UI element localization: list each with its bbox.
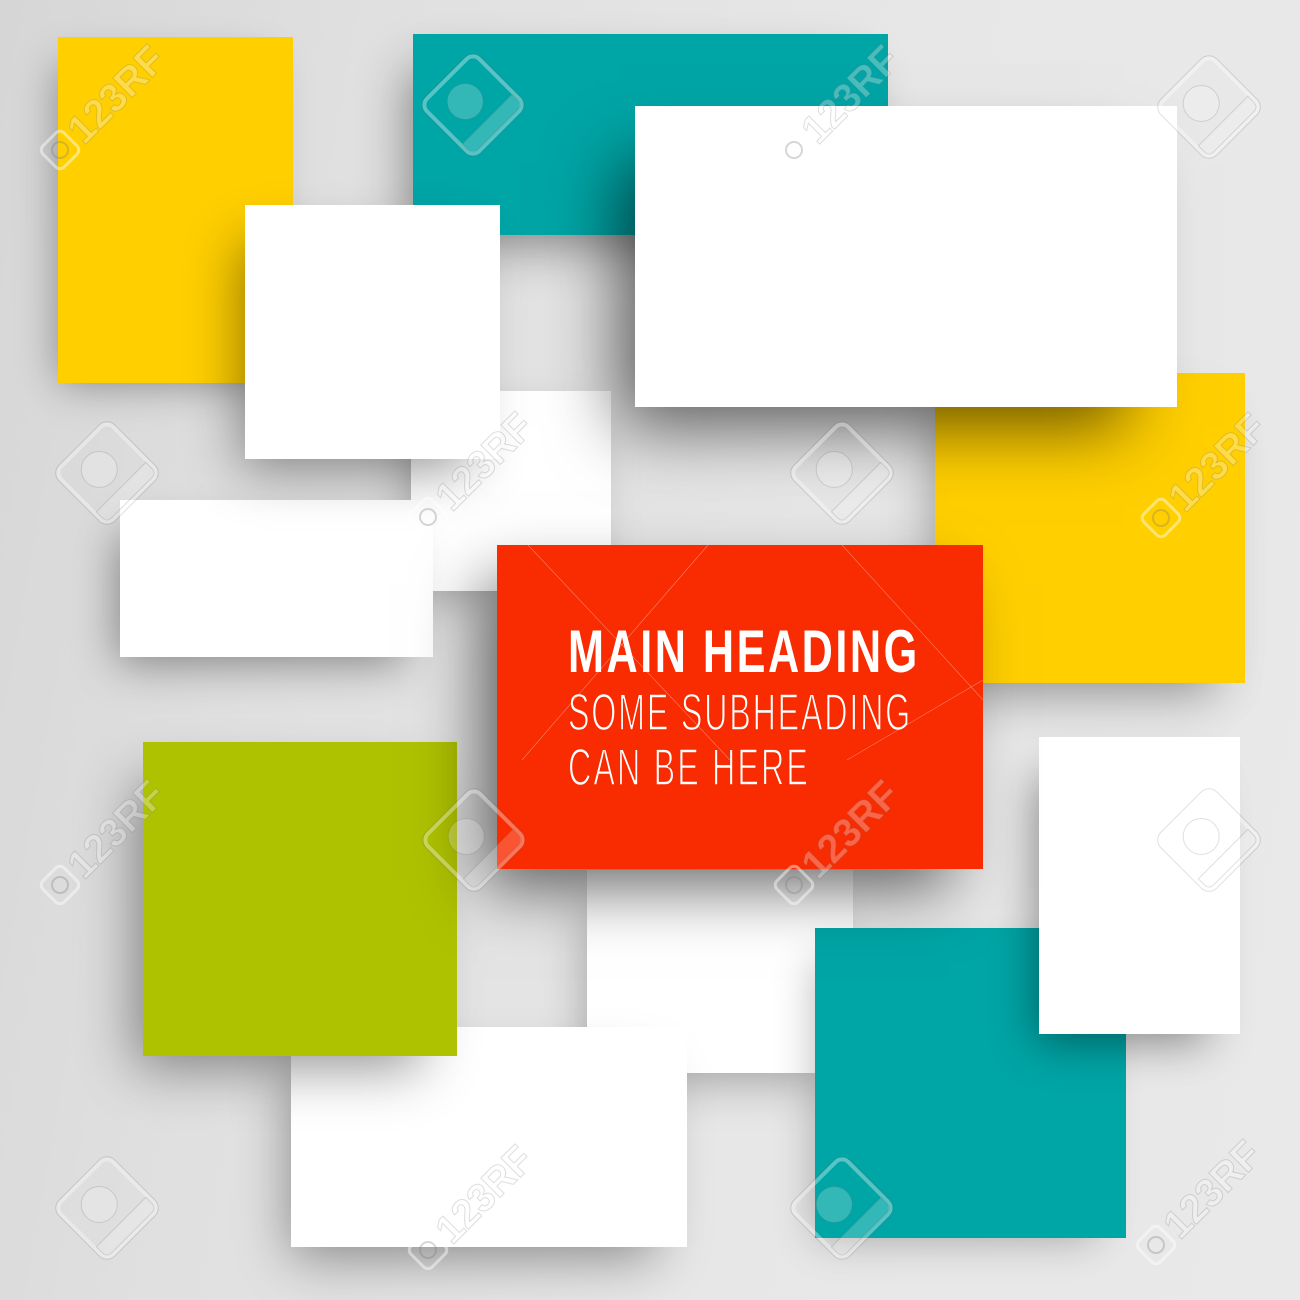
main heading text: MAIN HEADING: [568, 619, 917, 686]
watermark text: 123RF marks: 123RF: [59, 38, 174, 152]
panel: white rectangle left: [120, 500, 433, 657]
watermark text: 123RF marks: 123RF: [1155, 1133, 1270, 1247]
panel: large white rectangle top right: [635, 106, 1177, 407]
panel: white rectangle below center: [587, 870, 853, 1073]
panel: white rectangle right: [1039, 737, 1240, 1034]
panel: yellow square right: [935, 373, 1245, 683]
subheading text: CAN BE HERE: [568, 739, 808, 797]
subheading text: SOME SUBHEADING: [568, 684, 910, 742]
panel: teal square bottom right: [815, 928, 1126, 1238]
watermark text: 123RF marks: 123RF: [793, 38, 908, 152]
subheading text: [568, 684, 910, 797]
watermark text: 123RF marks: 123RF: [427, 405, 542, 519]
panel: white rectangle bottom: [291, 1027, 687, 1247]
watermark text: 123RF marks: 123RF: [59, 773, 174, 887]
panel: red heading card: [497, 545, 983, 869]
panel: white square behind center: [411, 391, 611, 591]
panel: green square: [143, 742, 457, 1056]
watermark text: 123RF marks: 123RF: [427, 1138, 542, 1252]
watermark text: 123RF marks: 123RF: [793, 773, 908, 887]
panel: white square upper left: [245, 205, 500, 459]
watermark text: 123RF marks: 123RF: [1160, 406, 1275, 520]
panel: teal rectangle top: [413, 34, 888, 235]
panel: yellow rectangle top left: [58, 37, 293, 383]
